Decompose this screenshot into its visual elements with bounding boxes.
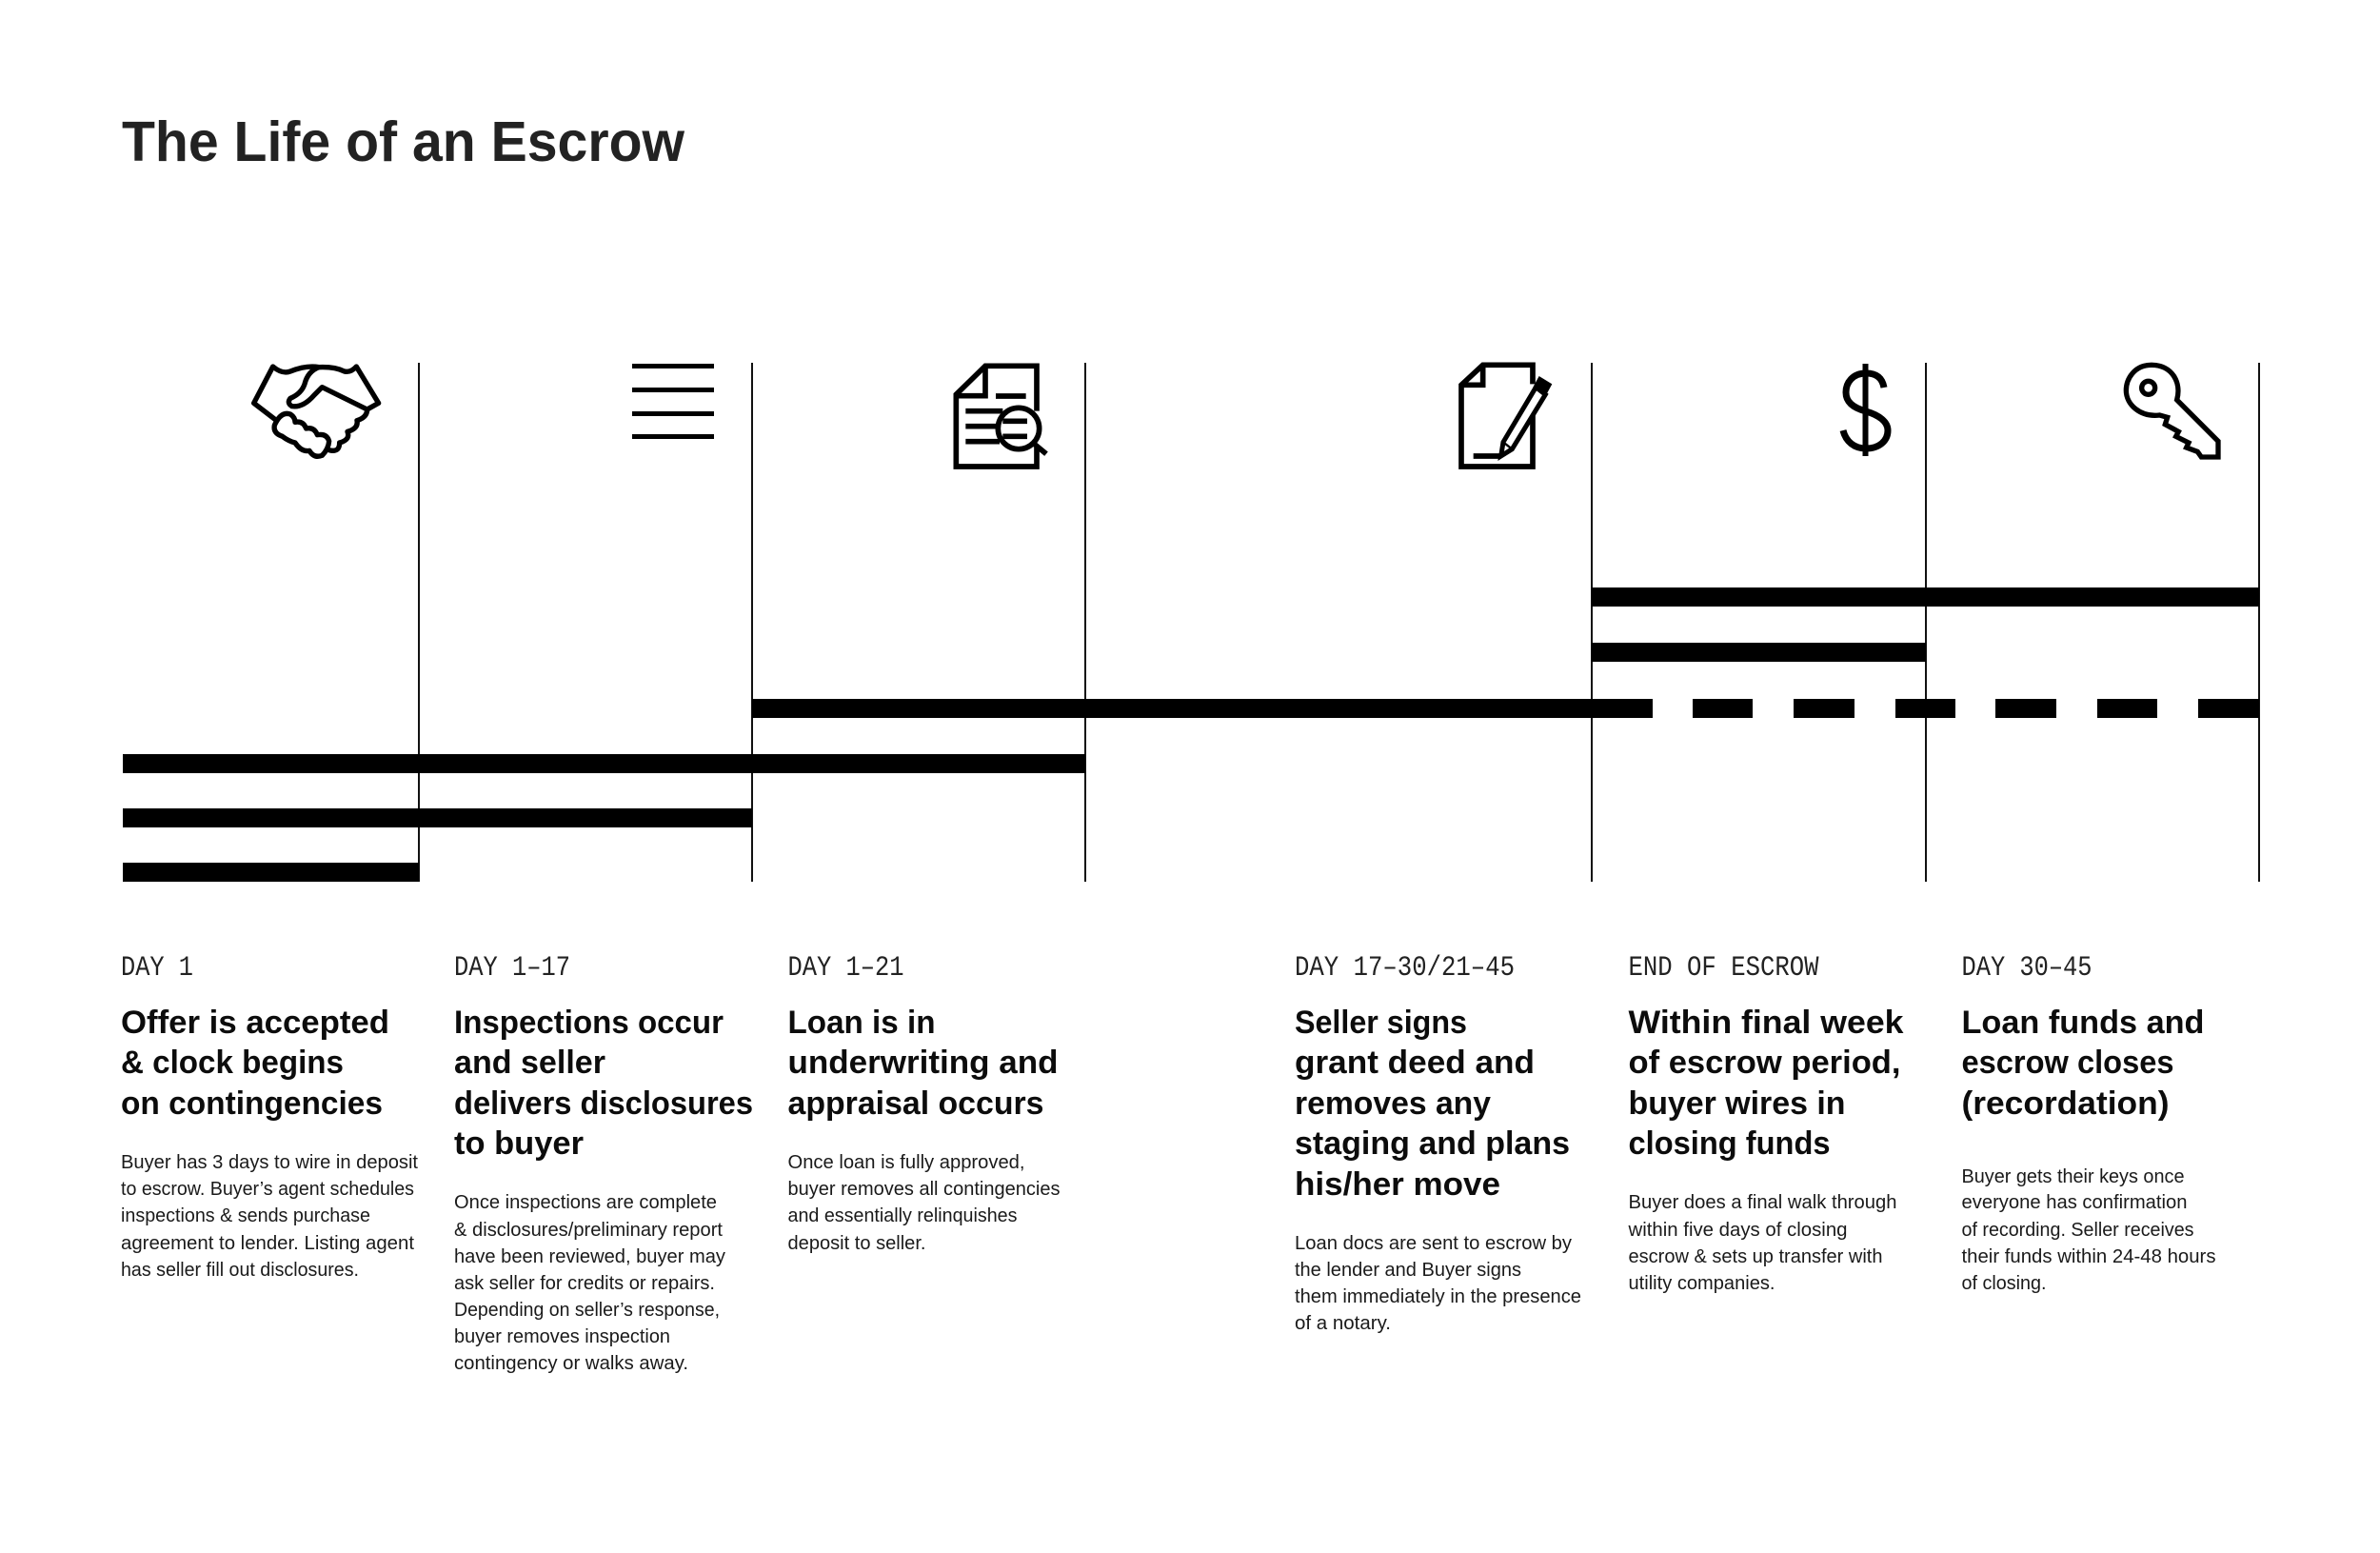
heading: removes any: [1295, 1085, 1491, 1122]
bar: final week row: [1592, 643, 1926, 662]
column: day 1-17: [454, 952, 753, 1374]
column: end of escrow: [1628, 952, 1904, 1294]
heading: Inspections occur: [454, 1005, 724, 1041]
description: their funds within 24-48 hours: [1961, 1245, 2216, 1267]
heading: grant deed and: [1295, 1045, 1535, 1081]
description: agreement to lender. Listing agent: [121, 1232, 414, 1254]
description: [1628, 1191, 1896, 1294]
date label: DAY 30–45: [1961, 952, 2092, 985]
description: Buyer gets their keys once: [1961, 1165, 2184, 1187]
description: them immediately in the presence: [1295, 1285, 1581, 1307]
description: utility companies.: [1628, 1272, 1775, 1294]
column: day 1: [121, 952, 418, 1281]
description: buyer removes inspection: [454, 1325, 670, 1347]
heading: his/her move: [1295, 1166, 1500, 1203]
description: the lender and Buyer signs: [1295, 1259, 1521, 1281]
heading: staging and plans: [1295, 1125, 1570, 1162]
heading: appraisal occurs: [788, 1085, 1043, 1122]
description: & disclosures/preliminary report: [454, 1219, 723, 1241]
heading: & clock begins: [121, 1045, 344, 1081]
icon: handshake: [254, 367, 379, 456]
vertical day dividers: [418, 363, 2260, 882]
description: escrow & sets up transfer with: [1628, 1245, 1883, 1267]
description: to escrow. Buyer’s agent schedules: [121, 1178, 414, 1200]
description: Loan docs are sent to escrow by: [1295, 1232, 1573, 1254]
heading: [454, 1005, 753, 1162]
title: The Life of an Escrow: [122, 110, 684, 173]
description: everyone has confirmation: [1961, 1191, 2188, 1213]
icon: document with magnifier: [956, 366, 1046, 467]
description: Once inspections are complete: [454, 1191, 717, 1213]
bar: day 1 row: [123, 863, 419, 882]
description: deposit to seller.: [788, 1232, 925, 1254]
description: contingency or walks away.: [454, 1352, 688, 1374]
icon: key: [2126, 365, 2218, 457]
description: of a notary.: [1295, 1312, 1391, 1334]
heading: [1961, 1005, 2205, 1122]
heading: escrow closes: [1961, 1045, 2174, 1081]
timeline chart: [123, 363, 2260, 882]
description: inspections & sends purchase: [121, 1205, 370, 1226]
description: Once loan is fully approved,: [788, 1151, 1024, 1173]
column: day 17-30/21-45: [1295, 952, 1581, 1334]
heading: Seller signs: [1295, 1005, 1467, 1041]
date label: DAY 1–21: [788, 952, 904, 985]
heading: (recordation): [1961, 1085, 2169, 1122]
description: Buyer has 3 days to wire in deposit: [121, 1151, 418, 1173]
heading: [121, 1005, 389, 1122]
heading: [1295, 1005, 1570, 1203]
description: [121, 1151, 418, 1281]
description: of closing.: [1961, 1272, 2047, 1294]
description: Depending on seller’s response,: [454, 1299, 720, 1321]
bar: day 1-17 row: [123, 808, 752, 827]
heading: [788, 1005, 1059, 1122]
icon: list lines: [632, 364, 714, 439]
icon: dollar sign: [1843, 364, 1888, 456]
heading: delivers disclosures: [454, 1085, 753, 1122]
description: of recording. Seller receives: [1961, 1219, 2193, 1241]
heading: underwriting and: [788, 1045, 1059, 1081]
bar: loan underwriting row with dashed continuation: [752, 699, 2259, 718]
description: ask seller for credits or repairs.: [454, 1272, 715, 1294]
heading: closing funds: [1628, 1125, 1830, 1162]
heading: of escrow period,: [1628, 1045, 1900, 1081]
bar: end of escrow row: [1592, 587, 2259, 607]
description: [1961, 1165, 2216, 1294]
heading: to buyer: [454, 1125, 584, 1162]
date label: END OF ESCROW: [1628, 952, 1818, 985]
description: have been reviewed, buyer may: [454, 1245, 726, 1267]
column: day 30-45: [1961, 952, 2216, 1294]
description: and essentially relinquishes: [788, 1205, 1017, 1226]
date label: DAY 1–17: [454, 952, 570, 985]
heading: on contingencies: [121, 1085, 383, 1122]
heading: Loan funds and: [1961, 1005, 2205, 1041]
heading: Loan is in: [788, 1005, 935, 1041]
description: within five days of closing: [1628, 1219, 1847, 1241]
column: day 1-21: [788, 952, 1061, 1254]
description: [788, 1151, 1061, 1254]
description: [1295, 1232, 1581, 1334]
description: [454, 1191, 726, 1374]
description: buyer removes all contingencies: [788, 1178, 1061, 1200]
heading: [1628, 1005, 1904, 1162]
bar: day 1-21 row: [123, 754, 1085, 773]
heading: Offer is accepted: [121, 1005, 389, 1041]
description: Buyer does a final walk through: [1628, 1191, 1896, 1213]
date label: DAY 1: [121, 952, 193, 985]
description: has seller fill out disclosures.: [121, 1259, 359, 1281]
icon: document with pencil: [1461, 365, 1552, 467]
heading: and seller: [454, 1045, 605, 1081]
heading: Within final week: [1628, 1005, 1904, 1041]
heading: buyer wires in: [1628, 1085, 1845, 1122]
date label: DAY 17–30/21–45: [1295, 952, 1515, 985]
